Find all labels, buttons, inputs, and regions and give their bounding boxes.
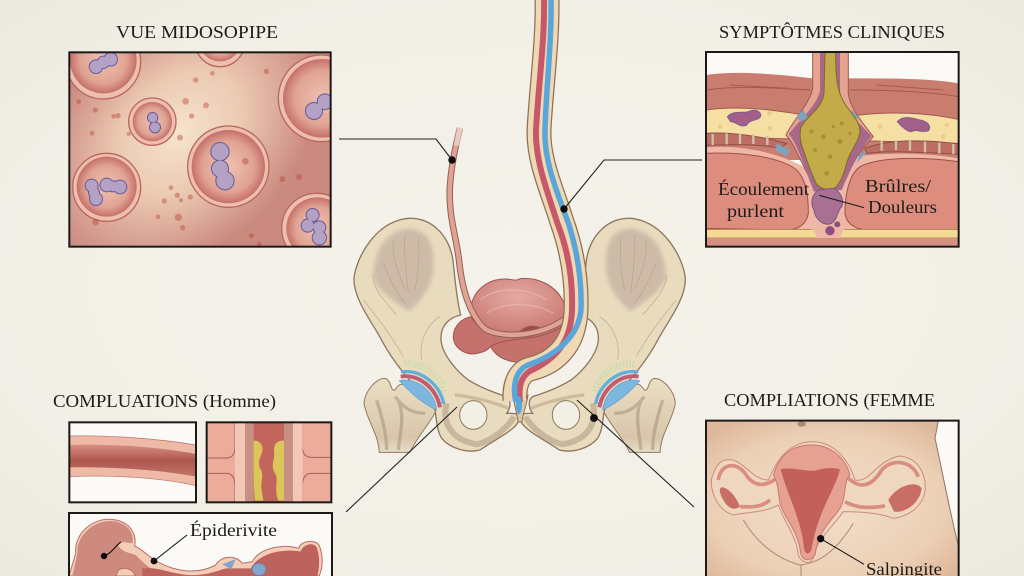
leader line: symptoms [560,160,702,213]
panel: epididymitis [69,513,332,576]
heading: vue microscopique: VUE MIDOSOPIPE [116,22,278,42]
label: écoulement purulent: Écoulement [718,178,809,199]
left hip bone [354,218,520,452]
panel: female reproductive anatomy [706,421,959,576]
panel: microscopic view [68,51,332,248]
heading: symptômes cliniques: SYMPTÔTMES CLINIQUES [719,21,945,42]
heading: complications femme: COMPLIATIONS (FEMME [724,390,935,411]
label: brûlures douleurs: Douleurs [868,197,937,217]
panel: clinical symptoms [706,52,959,247]
heading: complications homme: COMPLUATIONS (Homme) [53,391,276,412]
bladder [453,278,566,363]
tube: thin duct to bladder [450,120,566,335]
right hip bone [519,218,685,452]
tube: main urethra with blood vessels [513,0,581,422]
label: brûlures douleurs: Brûlres/ [865,176,931,196]
leader line: thin duct [339,139,456,164]
panel: inflamed urethra [207,422,331,502]
label: écoulement purulent: purlent [727,201,784,221]
leader line: complications femme [577,400,694,507]
label: épididymite: Épiderivite [190,519,277,540]
leader line: complications homme [346,407,457,512]
panel: healthy urethra [69,422,196,502]
central anatomy: pelvis [354,218,685,452]
